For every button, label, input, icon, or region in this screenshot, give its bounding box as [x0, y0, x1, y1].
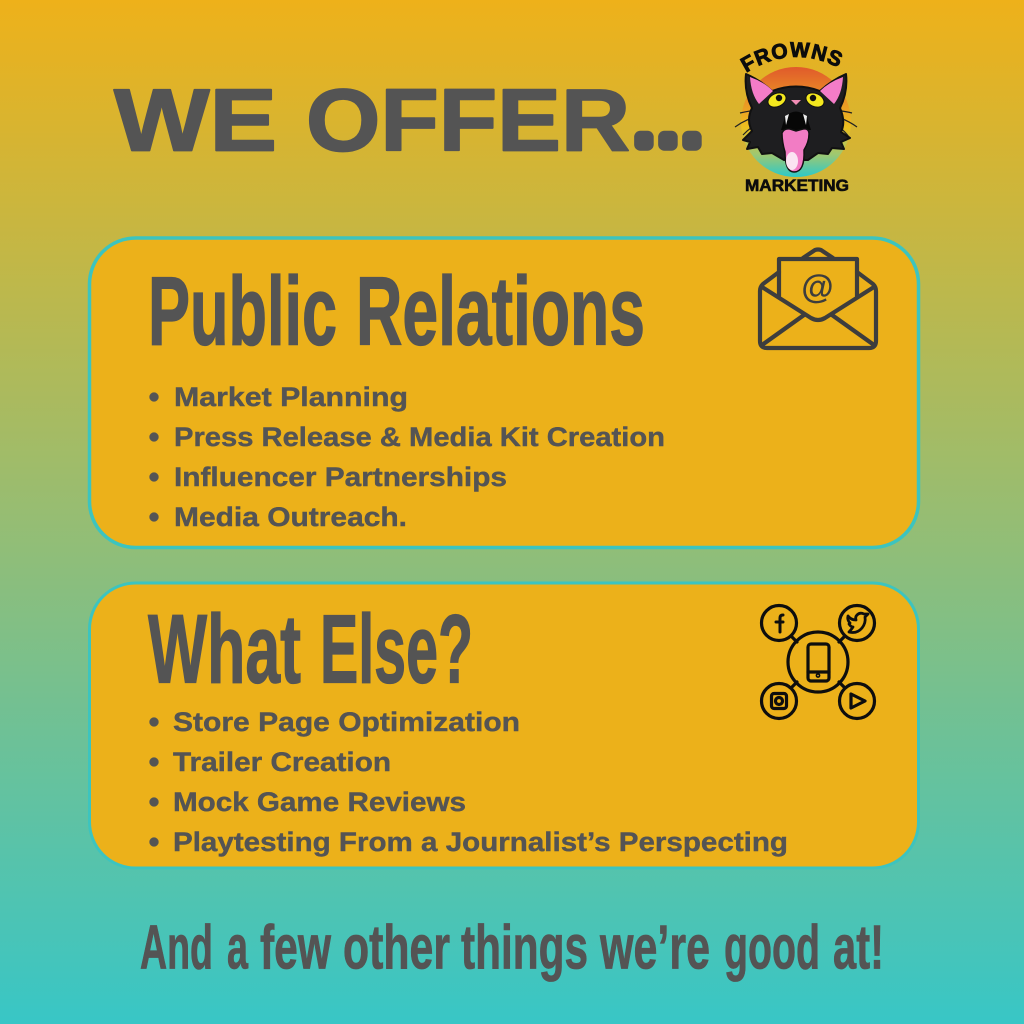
title: OFFER [306, 70, 630, 170]
icon: envelope [760, 250, 876, 348]
logo text: Marketing: MARKETING [745, 177, 849, 195]
bullet list: what else: Trailer Creation [173, 747, 391, 777]
bullet list: public relations: Influencer Partnerships [174, 462, 507, 492]
icon: social media network [762, 606, 874, 718]
logo: Frowns Marketing cat [734, 42, 858, 195]
footer tagline: things [461, 914, 588, 982]
bullet list: what else: Store Page Optimization [173, 707, 520, 737]
title: WE [114, 70, 277, 170]
footer tagline [140, 914, 884, 982]
footer tagline: other [343, 914, 450, 982]
logo whiskers [735, 109, 857, 137]
icon: at sign: @ [801, 268, 834, 305]
bullet list: public relations: Media Outreach. [174, 502, 407, 532]
title: ... [637, 100, 699, 156]
heading: public relations [148, 256, 645, 366]
bullet list: public relations [150, 382, 665, 532]
panel: public relations [90, 238, 918, 548]
footer tagline: we’re [599, 914, 710, 982]
logo eyes [766, 90, 788, 110]
logo nose [791, 100, 801, 105]
bullet list: what else [150, 707, 788, 857]
panel: what else [90, 583, 918, 868]
heading: public relations: Relations [356, 256, 645, 366]
bullet list: public relations: Press Release & Media Kit Creation [174, 422, 665, 452]
bullet list: what else: Playtesting From a Journalist’s Perspecting [173, 827, 788, 857]
footer tagline: a [227, 914, 248, 982]
logo text: Frowns: FROWNS [740, 42, 842, 73]
logo tongue [782, 129, 809, 172]
heading: what else: What [148, 594, 301, 704]
heading: public relations: Public [148, 256, 337, 366]
bullet list: what else: Mock Game Reviews [173, 787, 466, 817]
title [114, 70, 699, 170]
footer tagline: few [260, 914, 332, 982]
logo cat head [743, 74, 850, 160]
footer tagline: And [140, 914, 213, 982]
logo mouth [781, 112, 811, 130]
bullet list: public relations: Market Planning [174, 382, 408, 412]
heading: what else: Else? [320, 594, 473, 704]
logo sunset circle [741, 67, 851, 177]
logo ears [750, 77, 773, 104]
footer tagline: at! [833, 914, 884, 982]
footer tagline: good [724, 914, 820, 982]
panel background [90, 583, 918, 868]
panel background [90, 238, 918, 548]
